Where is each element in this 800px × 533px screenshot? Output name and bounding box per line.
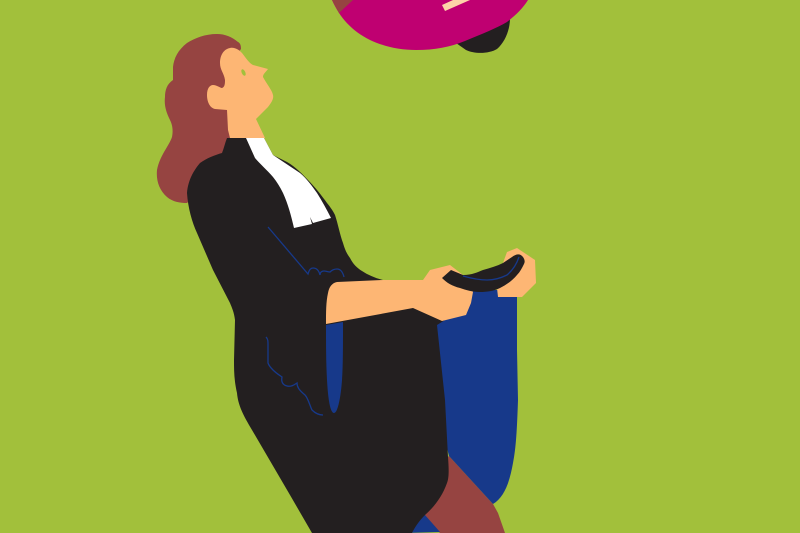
falling figure at top — [332, 0, 528, 53]
far hand — [497, 248, 536, 297]
white collar bands — [246, 138, 331, 228]
blue gown lining — [430, 290, 518, 504]
sleeve blue lining — [326, 322, 343, 413]
black robe — [187, 138, 449, 533]
brick limb — [332, 0, 353, 13]
black shoe — [456, 18, 510, 53]
neck and face — [207, 48, 273, 138]
magenta garment — [332, 0, 528, 50]
lawyer figure — [157, 34, 536, 533]
eye — [240, 69, 247, 76]
arm and hand — [326, 265, 473, 324]
lower sleeve fold line — [266, 337, 323, 415]
upper sleeve fold line — [268, 227, 344, 277]
hair — [157, 34, 241, 203]
lower blue lining — [405, 510, 440, 533]
cream skin highlight — [442, 0, 470, 11]
black sash in hands — [442, 254, 525, 292]
blue sash line — [463, 257, 519, 280]
leg — [420, 456, 505, 533]
